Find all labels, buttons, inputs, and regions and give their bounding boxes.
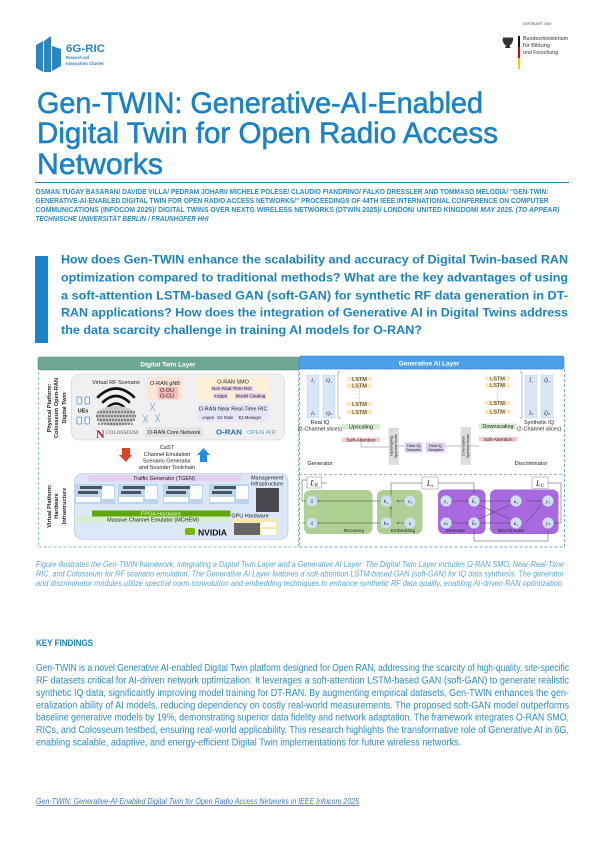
- spectral norm block right: [461, 428, 470, 464]
- logo: 6G-RIC: Innovation Cluster: [66, 61, 104, 66]
- discriminator stack: LSTM: [490, 383, 505, 389]
- research questions: a soft-attention LSTM-based GAN (soft-GAN) for synthetic RF data generation in DT-: [61, 288, 568, 302]
- box: SMO: xApps: [214, 394, 228, 398]
- loss boxes: [307, 477, 548, 489]
- logo: BMBF funding: GEFÖRDERT VOM: [523, 22, 551, 26]
- GPU hardware: GPU Hardware: [231, 514, 269, 520]
- synthetic IQ output: [517, 375, 561, 432]
- text: CaST: Scenario Generator: [143, 458, 191, 464]
- arrow: up blue: [197, 448, 210, 462]
- bar: traffic generator: [88, 475, 241, 482]
- logo: BMBF funding: und Forschung: [523, 50, 558, 56]
- question accent bar: [35, 256, 48, 343]
- label: virtual platform: Infrastructure: [62, 488, 68, 524]
- panel: generative AI layer: [298, 356, 564, 547]
- panel: physical platform: UEs: [78, 408, 88, 414]
- box: near real-time RIC: [197, 404, 269, 422]
- panel: digital twin layer: [38, 357, 299, 547]
- logo: BMBF funding: für Bildung: [523, 43, 550, 49]
- panel: recovery: [304, 490, 372, 534]
- spectral norm block right: Spectral Norm: [466, 434, 470, 458]
- loss boxes: s: [431, 484, 433, 489]
- real IQ input: I₁: [310, 378, 315, 384]
- authors and citation: TECHNISCHE UNIVERSITÄT BERLIN / FRAUNHOFER HHI: [36, 214, 209, 223]
- loss boxes: L: [536, 479, 540, 488]
- real IQ input: Qₙ: [326, 411, 333, 417]
- title: Digital Twin for Open Radio Access: [37, 117, 498, 150]
- bar: traffic generator: Traffic Generator (TGEN): [133, 476, 195, 482]
- label: discriminator: Discriminator: [515, 461, 547, 467]
- real IQ input: (2-Channel slices): [298, 426, 342, 432]
- real IQ input: Iₙ: [310, 411, 316, 417]
- GPU hardware: [231, 514, 277, 536]
- icon: user equipment: [77, 397, 90, 424]
- panel: discriminate: [490, 490, 558, 534]
- panel: embedding: Embedding: [391, 528, 415, 534]
- box: gNB: [147, 377, 183, 400]
- real IQ input: Q₁: [326, 378, 332, 384]
- node labels: z₁: [443, 499, 448, 505]
- box: gNB: O-DU: [160, 388, 174, 394]
- logo: colosseum: N: [96, 427, 105, 441]
- node labels: yₛ: [545, 521, 551, 527]
- generator stack: Upscaling: [349, 424, 373, 430]
- spectral norm block left: Upsampling: [390, 436, 394, 456]
- node labels: s: [409, 521, 411, 527]
- icon: antennas: [143, 403, 160, 423]
- research questions: [61, 252, 568, 337]
- node labels: [310, 497, 551, 527]
- discriminator stack: LSTM: [490, 410, 505, 416]
- bar: FPGA hardware: [92, 510, 230, 518]
- panel: generate: Generate: [445, 528, 465, 534]
- research questions: RAN applications? How does the integration of Generative AI in Digital Twins address: [61, 306, 568, 320]
- connectors upper: [338, 372, 522, 447]
- research questions: How does Gen-TWIN enhance the scalability and accuracy of Digital Twin-based RAN: [61, 252, 568, 266]
- box: near real-time RIC: xApps: [202, 415, 214, 420]
- logo: colosseum: [96, 427, 138, 441]
- node labels: hₛ: [384, 521, 389, 527]
- box: near real-time RIC: O-RAN Near Real-Time RIC: [199, 406, 267, 412]
- text: key findings body: enabling scalable, adaptive, and energy-efficient Digital Twin implementations for future wireless networks.: [36, 738, 461, 748]
- synthetic IQ output: Q̂₁: [544, 377, 550, 384]
- management infrastructure: [251, 476, 284, 512]
- real IQ input: Real IQ: [311, 420, 330, 426]
- real IQ input: [298, 375, 342, 432]
- loss boxes: L: [427, 479, 431, 488]
- synthetic IQ output: Q̂ₙ: [544, 410, 551, 417]
- node labels: u₁: [514, 521, 518, 527]
- research questions: the data scarcity challenge in training AI models for O-RAN?: [61, 323, 422, 337]
- heading: digital twin layer: Digital Twin Layer: [140, 362, 196, 368]
- label: virtual platform: Hardware: [54, 493, 60, 519]
- node labels: zₛ: [443, 521, 449, 527]
- heading: generative AI layer: [299, 356, 564, 369]
- loss boxes: L: [310, 478, 315, 488]
- icon: wifi arcs: [98, 388, 134, 407]
- text: key findings body: RF datasets critical for AI-driven network optimization. It leverages a soft-attention LSTM-based GAN (soft-GAN) to generate realistic: [36, 676, 569, 686]
- label: physical platform: Digital Twin: [62, 392, 68, 423]
- fake and real IQ samples: [405, 442, 445, 452]
- text: key findings body: RICs, and Colosseum testbed, ensuring real-world applicability. This research highlights the transformative role of Generative AI in 6G,: [36, 725, 569, 736]
- logo: nvidia: NVIDIA: [198, 528, 227, 538]
- loss boxes: R: [314, 484, 318, 488]
- connectors lower: [302, 480, 561, 541]
- box: core network: O-RAN Core Network: [148, 430, 201, 436]
- panel: recovery: Recovery: [344, 528, 365, 534]
- text: CaST: Channel Emulation: [144, 452, 190, 458]
- logo: 6G-RIC: [36, 36, 105, 72]
- heading: digital twin layer: [38, 357, 299, 370]
- box: SMO: Non Real-Time RIC: [212, 386, 253, 391]
- text: key findings body: eralization ability of AI models, reducing dependency on costly real-world measurements. The proposed soft-GAN model outperforms: [36, 700, 569, 712]
- generator stack: LSTM: [352, 377, 367, 383]
- arrow: down red: [119, 448, 132, 462]
- bar: channel emulator: [76, 516, 230, 524]
- text: CaST: and Sounder Toolchain: [139, 465, 195, 471]
- logo: 6G-RIC: Research and: [66, 55, 89, 60]
- panel: discriminate: Discriminate: [498, 528, 525, 534]
- discriminator stack: Soft-Attention: [483, 437, 513, 443]
- panel: embedding: [377, 490, 422, 534]
- discriminator stack: LSTM: [490, 376, 505, 382]
- node labels: ŝ: [311, 521, 314, 527]
- node labels: u₁: [514, 499, 518, 505]
- box: gNB: O-RAN gNB: [150, 381, 180, 387]
- authors and citation: COMMUNICATIONS (INFOCOM 2025)/ DIGITAL TWINS OVER NEXTG WIRELESS NETWORKS (DTWIN 2025)/ LONDON/ UNITED KINGDOM/ MAY 2025. (TO APPEAR): [36, 205, 560, 214]
- discriminator stack: [479, 376, 518, 443]
- text: key findings body: synthetic IQ data, significantly improving model training for DT-RAN. By augmenting empirical datasets, Gen-TWIN enhances the gen-: [36, 688, 569, 699]
- title rule: [35, 182, 569, 183]
- divider: [299, 474, 564, 476]
- loss boxes: U: [540, 484, 544, 489]
- node labels: y₁: [545, 499, 550, 505]
- panel: generate: [438, 490, 486, 534]
- logo: nvidia: [185, 528, 227, 538]
- generator stack: LSTM: [352, 410, 367, 416]
- label: physical platform: [47, 378, 68, 438]
- fake and real IQ samples: Samples: [406, 448, 421, 452]
- bar: FPGA hardware: FPGA Hardware: [141, 512, 181, 518]
- management infrastructure: Infrastructure: [251, 482, 283, 488]
- text: CaST: CaST: [160, 445, 175, 451]
- figure caption: [36, 560, 564, 588]
- box: near real-time RIC: E2 Node: [217, 415, 234, 420]
- box: near real-time RIC: E2 Manager: [239, 415, 262, 420]
- management infrastructure: Management: [251, 476, 284, 482]
- icon: colosseum: [96, 406, 136, 426]
- label: virtual platform: Virtual Platform:: [47, 484, 53, 528]
- authors and citation: [36, 187, 560, 223]
- bar: channel emulator: Massive Channel Emulator (MCHEM): [107, 518, 199, 524]
- synthetic IQ output: Î₁: [528, 376, 533, 384]
- generator stack: [342, 377, 380, 444]
- generator stack: LSTM: [352, 384, 367, 390]
- box: SMO: O-RAN SMO: [217, 380, 250, 386]
- box: core network: [145, 427, 203, 437]
- servers: [75, 484, 249, 504]
- heading: key findings: KEY FINDINGS: [36, 638, 93, 648]
- latent nodes: [306, 496, 554, 528]
- spectral norm block left: Spectral Norm: [394, 434, 398, 458]
- label: physical platform: Physical Platform:: [47, 383, 53, 432]
- box: SMO: [197, 377, 269, 401]
- fake and real IQ samples: Samples: [428, 448, 443, 452]
- synthetic IQ output: Îₙ: [528, 409, 534, 417]
- panel: physical platform: [72, 374, 284, 441]
- panel: physical platform: Virtual RF Scenario: [92, 380, 140, 386]
- logo: O-RAN: O-RAN: [216, 428, 242, 436]
- spectral norm block right: Convolution: [462, 436, 466, 456]
- discriminator stack: LSTM: [490, 401, 505, 407]
- title: [37, 87, 498, 181]
- box: SMO: Model Catalog: [236, 394, 266, 398]
- spectral norm block left: [389, 428, 398, 464]
- label: generator: Generator: [307, 461, 333, 467]
- logo: open air: OPEN AIR: [247, 430, 276, 436]
- logo: colosseum: COLOSSEUM: [106, 430, 138, 436]
- logo: 6G-RIC: 6G-RIC: [66, 43, 105, 55]
- node labels: h₁: [384, 499, 388, 505]
- fake and real IQ samples: Fake IQ: [407, 444, 420, 448]
- label: physical platform: Colosseum Open-RAN: [54, 378, 60, 438]
- text: key findings body: [36, 663, 569, 748]
- discriminator stack: Downscaling: [482, 424, 514, 430]
- node labels: ĥ₁: [472, 497, 476, 505]
- title: Gen-TWIN: Generative-AI-Enabled: [37, 87, 483, 120]
- node labels: x̂: [310, 499, 314, 505]
- node labels: ĥₛ: [472, 519, 477, 527]
- panel: virtual platform: [74, 474, 288, 540]
- label: virtual platform: [47, 484, 68, 528]
- logo: BMBF funding: Bundesministerium: [523, 36, 568, 42]
- synthetic IQ output: Synthetic IQ: [524, 420, 555, 426]
- generator stack: LSTM: [352, 402, 367, 408]
- research questions: optimization compared to traditional methods? What are the key advantages of using: [61, 270, 568, 284]
- box: gNB: O-CU: [160, 394, 174, 400]
- heading: generative AI layer: Generative AI Layer: [399, 360, 460, 368]
- generator stack: Soft-Attention: [346, 438, 376, 444]
- title: Networks: [37, 148, 163, 181]
- text: CaST: [139, 445, 195, 471]
- logo: BMBF funding: [502, 22, 568, 69]
- source link: Gen-TWIN: Generative-AI-Enabled Digital Twin for Open Radio Access Networks in IEEE Infocom 2025: [36, 797, 359, 806]
- synthetic IQ output: (2-Channel slices): [517, 426, 561, 432]
- fake and real IQ samples: Real IQ: [429, 444, 442, 448]
- node labels: x₁: [407, 499, 412, 505]
